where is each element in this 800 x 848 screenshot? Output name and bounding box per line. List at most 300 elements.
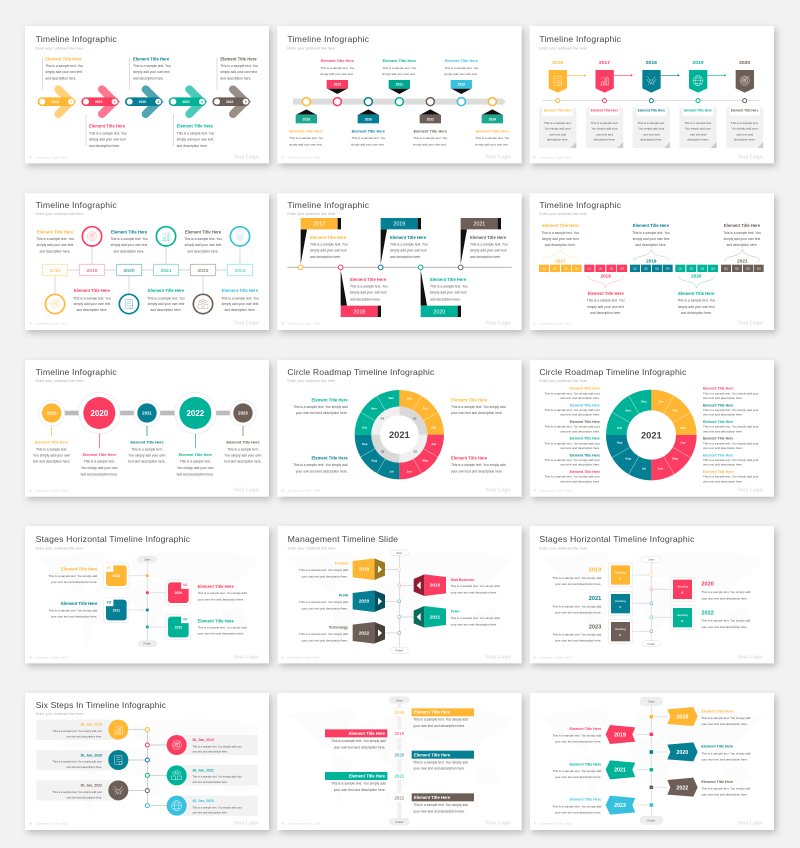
- icon circle 2018: [45, 294, 65, 314]
- item 2022: your own text and description here.: [413, 809, 465, 813]
- step 2018: You simply add your: [638, 127, 664, 131]
- upper text blocks: simply add your own text: [310, 248, 347, 252]
- text block 3: simply add your own text: [133, 70, 170, 74]
- slide 14 spine: [397, 703, 401, 818]
- slide 10 title: Stages Horizontal Timeline Infographic: [36, 534, 191, 544]
- slide 10 text: Element Title Here: [198, 618, 235, 623]
- arrow 2022: 2022: [226, 100, 234, 104]
- upper text blocks: simply add your own text: [37, 243, 73, 247]
- step 2016: [539, 60, 586, 148]
- card B: Heading: [677, 585, 688, 589]
- slide 8 callouts: Element Title Here: [451, 397, 488, 402]
- text block 1: simply add your own text: [45, 70, 82, 74]
- slide 15 footer: |Company | Date 2020: [540, 821, 573, 825]
- donut chart with months and quarters: Dec: [389, 396, 394, 400]
- left ribbon text: Element Title Here: [569, 762, 601, 766]
- slide 14 world map: [287, 709, 512, 802]
- year labels: 2017: [555, 258, 566, 263]
- short column text: You simply add your own: [33, 453, 70, 457]
- slide 9 right list: own text and description here.: [703, 446, 743, 450]
- ribbon 2018: [667, 707, 698, 726]
- slide 9 right list: own text and description here.: [703, 429, 743, 433]
- slide 9 right list: [703, 387, 759, 483]
- footer: 58: [533, 155, 536, 159]
- tag 2020: 2020: [359, 599, 370, 604]
- quarter labels: Q2: [644, 267, 648, 271]
- right ribbon text: [701, 709, 751, 797]
- card D: Heading: [677, 613, 688, 617]
- footer: Your Logo: [233, 321, 259, 327]
- upper text blocks: This is a sample text. You: [632, 231, 670, 235]
- tag 2020: [358, 109, 379, 123]
- slide 4: circle icons and year boxes: [25, 193, 269, 330]
- circle 2023: 2023: [238, 411, 248, 416]
- left ribbon text: your own text and description here.: [555, 740, 601, 744]
- arrow 2018: 1: [70, 100, 72, 104]
- lower text blocks: This is a sample text. You: [413, 136, 448, 140]
- slide 9 right list: This is a sample text. You simply add your: [703, 475, 759, 479]
- donut chart with months and quarters: May: [422, 459, 429, 463]
- slide 10 panel: [25, 526, 269, 663]
- flag 2018: [338, 265, 381, 317]
- slide 11 finish pill: Finish: [396, 649, 404, 653]
- footer: [29, 155, 259, 161]
- left step text: own text and description here.: [67, 765, 102, 769]
- slide 11 text: This is a sample text. You simply add: [299, 632, 348, 636]
- upper text blocks: simply add your own text: [185, 243, 221, 247]
- lower text blocks: Element Title Here: [588, 291, 624, 296]
- slide 8 callouts: This is a sample text. You simply add: [451, 405, 506, 409]
- step 2017: You simply add your: [591, 127, 618, 131]
- text right: 2022: [701, 610, 714, 616]
- short column text: text and description here.: [224, 460, 262, 464]
- arrow 2019: 2019: [95, 100, 103, 104]
- footer: |Company | Date 2020: [36, 155, 68, 159]
- horizontal line: [542, 99, 760, 102]
- finish pill: Finish: [648, 642, 656, 646]
- lower text blocks: This is a sample text. You: [430, 285, 468, 289]
- icon circle 2021: [156, 227, 176, 246]
- icon circle 2019: [82, 227, 102, 246]
- spine markers: [650, 574, 653, 633]
- lower text blocks: simply add your own text: [587, 305, 624, 309]
- step 2017: [586, 60, 633, 148]
- long column text: You simply add your own: [177, 466, 214, 470]
- footer: |Company | Date 2020: [36, 321, 68, 325]
- slide 9 left list: Element Title Here: [570, 420, 600, 424]
- arrow 2021: 4: [201, 100, 203, 104]
- short column text: This is a sample text.: [131, 447, 163, 451]
- connectors: [55, 246, 240, 294]
- slides 8 and 9: circle roadmaps: [277, 360, 774, 497]
- slide 14 finish pill: [389, 818, 410, 825]
- tag 2021: [389, 80, 410, 94]
- upper text blocks: Element Title Here: [321, 59, 354, 63]
- card C: Heading: [615, 599, 626, 603]
- slide 9 donut chart: Jul: [642, 467, 646, 471]
- short column text: This is a sample text.: [36, 447, 67, 451]
- step 2019: [679, 60, 726, 148]
- braces: [543, 249, 760, 288]
- quarter labels: Q4: [666, 267, 670, 271]
- slide 9 donut chart: [606, 390, 697, 480]
- slide 10 text: your own text and description here.: [51, 615, 98, 619]
- text block 4: simply add your own text: [177, 138, 213, 142]
- card B: [671, 577, 694, 601]
- flag 2017: [298, 218, 341, 270]
- donut chart with months and quarters: Aug: [371, 459, 377, 463]
- ribbon 2021: 2021: [614, 768, 626, 774]
- slide 9 left list: This is a sample text. You simply add your: [544, 408, 600, 412]
- flag 2021: 2021: [473, 222, 485, 228]
- slide 8 callouts: Element Title Here: [311, 397, 348, 402]
- tag 2023: [451, 80, 472, 94]
- year labels: 2021: [395, 774, 405, 779]
- footer: 67: [533, 655, 536, 659]
- subtitle: Enter your subhead line here: [36, 46, 83, 50]
- upper text blocks: Element Title Here: [383, 59, 416, 63]
- card C: [609, 592, 632, 616]
- slide 11 text: Technology: [329, 626, 348, 630]
- slide 9 left list: own text and description here.: [560, 396, 600, 400]
- ribbon 2019: 2019: [614, 732, 626, 738]
- quarter labels: Q2: [598, 267, 603, 271]
- upper text blocks: [320, 59, 479, 76]
- slide 11 text: Product: [335, 562, 349, 566]
- lower text blocks: This is a sample text. You: [475, 136, 510, 140]
- slide 9 left list: This is a sample text. You simply add your: [544, 391, 600, 395]
- ribbon 2022: 2022: [676, 785, 688, 791]
- footer: Your Logo: [737, 655, 763, 661]
- donut chart with months and quarters: 02: [414, 449, 417, 453]
- left step text: own text and description here.: [67, 734, 102, 738]
- slide 8 callouts: your own text and description here.: [296, 411, 348, 415]
- arrow 2018: [38, 89, 75, 114]
- item 2019: [325, 729, 387, 749]
- slide 11 text: Team: [451, 610, 460, 614]
- quarter boxes 2021: [721, 265, 764, 272]
- slide 9 left list: This is a sample text. You simply add your: [544, 425, 600, 429]
- upper text blocks: Element Title Here: [542, 223, 579, 228]
- text right: This is a sample text. You simply add: [701, 619, 751, 623]
- text left: 2023: [589, 624, 601, 630]
- card 2021: 2021: [113, 608, 120, 612]
- step 2016: 2016: [552, 60, 563, 66]
- upper text blocks: Element Title Here: [111, 229, 148, 234]
- footer: |Company | Date 2020: [288, 321, 321, 325]
- quarter labels: Q3: [564, 267, 568, 271]
- quarter labels: Q2: [689, 267, 694, 271]
- text block 1: This is a sample text. You: [45, 64, 83, 68]
- step 2016: description here.: [547, 138, 569, 142]
- item 2020: [412, 751, 474, 771]
- circle 2019: [39, 400, 65, 426]
- upper text blocks: simply add your own text .: [320, 72, 355, 76]
- flag 2017: 2017: [313, 222, 325, 228]
- footer: 56: [29, 155, 32, 159]
- slide 11 text: your own text and description here.: [451, 622, 497, 626]
- donut chart with months and quarters: Oct: [362, 425, 367, 429]
- upper text blocks: and description here.: [726, 243, 758, 247]
- card A: A: [619, 576, 622, 580]
- slide 9 left list: own text and description here.: [560, 413, 600, 417]
- lower text blocks: and description here.: [76, 308, 108, 312]
- slide 9 panel: [530, 360, 774, 497]
- slide 11 text: This is a sample text. You simply add: [299, 600, 348, 604]
- lower text blocks: and description here.: [590, 311, 621, 315]
- right ribbon text: your own text and description here.: [701, 757, 748, 761]
- long column text: Element Title Here: [179, 453, 212, 457]
- right ribbon text: This is a sample text. You simply add: [701, 716, 751, 720]
- donut chart with months and quarters: Apr: [431, 442, 437, 446]
- left ribbon text: your own text and description here.: [555, 810, 601, 814]
- text left: your own text and description here.: [555, 582, 602, 586]
- text left: This is a sample text. You simply add: [552, 605, 602, 609]
- lower text blocks: simply add your own text .: [289, 142, 324, 146]
- step 2016: This is a sample text.: [544, 121, 572, 125]
- right step text: 30, Jan, 2023: [192, 799, 214, 803]
- drop lines: [52, 426, 243, 448]
- lower text blocks: Element Title Here: [414, 129, 447, 133]
- upper text blocks: simply add your own text: [470, 248, 507, 252]
- text block 2: [89, 124, 127, 148]
- upper text blocks: This is a sample text. You: [382, 66, 417, 70]
- footer: Your Logo: [233, 821, 259, 827]
- upper text blocks: simply add your own text: [390, 248, 427, 252]
- arrow 2020: [125, 89, 162, 114]
- slide 9 right list: Element Title Here: [703, 453, 733, 457]
- slide 10 text: Element Title Here: [61, 601, 98, 606]
- item 2019: your own text and description here.: [334, 745, 386, 749]
- year labels: 2019: [395, 731, 405, 736]
- slide 15 finish pill: [640, 816, 663, 824]
- year labels: [387, 708, 411, 802]
- year labels: 2022: [197, 268, 209, 274]
- footer: |Company | Date 2020: [540, 655, 572, 659]
- footer: |Company | Date 2020: [540, 155, 572, 159]
- footer: 62: [29, 489, 32, 493]
- step 2019: You simply add your: [685, 127, 711, 131]
- lower text blocks: simply add your own text .: [413, 142, 448, 146]
- slide 9 donut chart: Feb: [673, 409, 678, 413]
- upper text blocks: Element Title Here: [633, 223, 670, 228]
- arrow 2019: 2: [114, 100, 116, 104]
- short column text: text and description here.: [33, 460, 70, 464]
- slide 14 panel: [277, 693, 522, 830]
- footer: |Company | Date 2020: [36, 489, 68, 493]
- flag 2018: 2018: [353, 309, 365, 315]
- tag 2022: [353, 622, 385, 644]
- upper text blocks: Element Title Here: [724, 223, 761, 228]
- donut chart with months and quarters: 2021: [389, 430, 410, 440]
- spine: [118, 730, 177, 806]
- upper text blocks: and description here.: [39, 249, 71, 253]
- year labels: 2022: [395, 795, 405, 800]
- step 2018: This is a sample text.: [638, 121, 665, 125]
- slide 8 callouts: This is a sample text. You simply add: [451, 463, 506, 467]
- card 2022: 2022: [175, 625, 182, 629]
- title: Timeline Infographic: [539, 200, 622, 210]
- right ribbon text: Element Title Here: [701, 745, 733, 749]
- lower text blocks: Element Title Here: [352, 129, 385, 133]
- footer: |Company | Date 2020: [36, 821, 68, 825]
- text block 3: [133, 56, 171, 80]
- donut chart with months and quarters: 01: [413, 416, 417, 420]
- text left: 2021: [589, 596, 601, 602]
- lower text blocks: simply add your own text .: [351, 142, 386, 146]
- quarter labels: Q4: [620, 267, 624, 271]
- left step text: [53, 723, 102, 799]
- slide 10 text: Element Title Here: [61, 567, 98, 572]
- tag 2021: 2021: [430, 614, 441, 619]
- slide 9 donut chart: May: [672, 457, 679, 461]
- upper text blocks: This is a sample text. You: [541, 231, 579, 235]
- year labels: 2021: [737, 258, 748, 263]
- item 2021: This is a sample text. You simply add: [331, 782, 386, 786]
- card A: Heading: [615, 570, 626, 574]
- lower text blocks: Element Title Here: [350, 277, 387, 282]
- slide 9 right list: This is a sample text. You simply add your: [703, 425, 759, 429]
- donut chart with months and quarters: Nov: [371, 406, 377, 410]
- left step text: This is a sample text. You simply add your: [53, 729, 102, 733]
- slide 13: six steps: [25, 693, 269, 830]
- slide 11 spine markers: [398, 568, 401, 634]
- slide 11 text: This is a sample text. You simply add: [299, 568, 348, 572]
- lower text blocks: [587, 291, 715, 315]
- slide 9 left list: own text and description here.: [560, 429, 600, 433]
- step 2020: [726, 60, 763, 148]
- slide 14 footer: Your Logo: [485, 821, 511, 827]
- quarter labels: [542, 267, 761, 271]
- footer: [29, 821, 259, 827]
- slide 9 donut chart: Jun: [658, 467, 663, 471]
- tag 2022: 2022: [427, 118, 434, 122]
- card 2018: 2018: [113, 574, 120, 578]
- slide 8 callouts: This is a sample text. You simply add: [293, 405, 348, 409]
- text left: [552, 567, 602, 643]
- slide 11 text: Profit: [339, 594, 349, 598]
- long column text: text and description here.: [81, 472, 118, 476]
- flag 2021: [458, 218, 501, 270]
- flag 2020: [418, 265, 461, 317]
- text right: This is a sample text. You simply add: [701, 590, 751, 594]
- slide 15 start pill: Start: [648, 700, 655, 704]
- long column text: [81, 453, 214, 476]
- year labels: 2021: [160, 268, 172, 274]
- slide 10 text: your own text and description here.: [198, 632, 244, 636]
- slide 11 footer: [281, 655, 511, 661]
- step 2017: own text and: [596, 132, 613, 136]
- text block 4: and description here.: [177, 144, 208, 148]
- slide 15 footer: 70: [533, 821, 537, 825]
- slide 11 footer: Your Logo: [485, 655, 511, 661]
- lower text blocks: Element Title Here: [74, 288, 111, 293]
- timeline bar: [293, 97, 506, 106]
- arrow 2018: 2018: [51, 100, 59, 104]
- slide 10 text: This is a sample text. You simply add: [198, 591, 247, 595]
- ribbon 2021: [606, 760, 635, 779]
- slide 9 right list: This is a sample text. You simply add your: [703, 458, 759, 462]
- slide 8 footer: 63: [281, 489, 285, 493]
- subtitle: Enter your subhead line here: [287, 46, 335, 50]
- circle 2022: 2022: [186, 409, 205, 418]
- slides 14 and 15: vertical timelines: [277, 693, 774, 830]
- title: Stages Horizontal Timeline Infographic: [539, 534, 695, 544]
- text block 5: and description here.: [220, 76, 251, 80]
- text block 1: and description here.: [45, 76, 76, 80]
- tag 2019: [414, 574, 446, 596]
- slide 14 footer: 69: [281, 821, 285, 825]
- upper text blocks: simply add your own text: [111, 243, 147, 247]
- slide 6: quarters timeline: [530, 193, 774, 330]
- quarter labels: Q1: [678, 267, 683, 271]
- slide 9 donut chart: Jan: [658, 400, 664, 404]
- year labels: [555, 258, 748, 279]
- upper text blocks: simply add your own text: [724, 237, 760, 241]
- slide 10 text: [48, 567, 247, 636]
- ribbon 2022: [667, 778, 698, 797]
- text left: your own text and description here.: [555, 639, 602, 643]
- lower text blocks: simply add your own text: [148, 302, 184, 306]
- quarter labels: Q4: [575, 267, 579, 271]
- card 2022: #4: [183, 617, 188, 621]
- upper text blocks: Element Title Here: [390, 235, 427, 240]
- title: Timeline Infographic: [36, 200, 117, 210]
- arrow 2022: [212, 89, 250, 114]
- text left: 2019: [589, 567, 601, 573]
- upper text blocks: Element Title Here: [445, 59, 478, 63]
- step bars: [36, 720, 258, 816]
- card 2018: [104, 563, 129, 588]
- slide 9 left list: Element Title Here: [570, 387, 600, 391]
- footer: Your Logo: [485, 155, 511, 161]
- text block 2: simply add your own text: [89, 138, 126, 142]
- subtitle: Enter your subhead line here: [539, 212, 587, 216]
- tag 2019: [327, 80, 348, 94]
- slide 9 left list: This is a sample text. You simply add your: [544, 458, 600, 462]
- ribbon 2020: [667, 742, 698, 761]
- lower text blocks: [289, 129, 510, 146]
- quarter boxes 2017: [539, 265, 582, 272]
- subtitle: Enter your subhead line here: [36, 712, 83, 716]
- upper text blocks: This is a sample text. You: [36, 237, 74, 241]
- card 2022: [166, 614, 191, 640]
- slide 15 spine: [635, 705, 667, 817]
- text block 3: Element Title Here: [133, 56, 170, 61]
- flag 2020: 2020: [433, 309, 445, 315]
- short column text: Element Title Here: [35, 441, 68, 445]
- footer: Your Logo: [233, 488, 259, 494]
- arrow 2021: 2021: [182, 100, 190, 104]
- slide 10 text: This is a sample text. You simply add: [198, 625, 247, 629]
- flag 2019: 2019: [393, 222, 405, 228]
- donut chart with months and quarters: Mar: [431, 425, 437, 429]
- slide 9 donut chart: Aug: [625, 457, 631, 461]
- subtitle: Enter your subhead line here: [539, 546, 587, 550]
- arrow 2020: 3: [157, 100, 159, 104]
- title: Timeline Infographic: [539, 34, 622, 44]
- right ribbon text: your own text and description here.: [701, 722, 748, 726]
- donut chart with months and quarters: Jun: [407, 470, 412, 474]
- lower text blocks: simply add your own text: [222, 302, 258, 306]
- lower text blocks: and description here.: [224, 308, 256, 312]
- long column text: This is a sample text.: [180, 460, 211, 464]
- year labels: 2020: [395, 752, 405, 757]
- lower text blocks: Element Title Here: [290, 129, 323, 133]
- item 2018: your own text and description here.: [413, 724, 465, 728]
- footer: Your Logo: [485, 321, 511, 327]
- lower text blocks: and description here.: [681, 311, 712, 315]
